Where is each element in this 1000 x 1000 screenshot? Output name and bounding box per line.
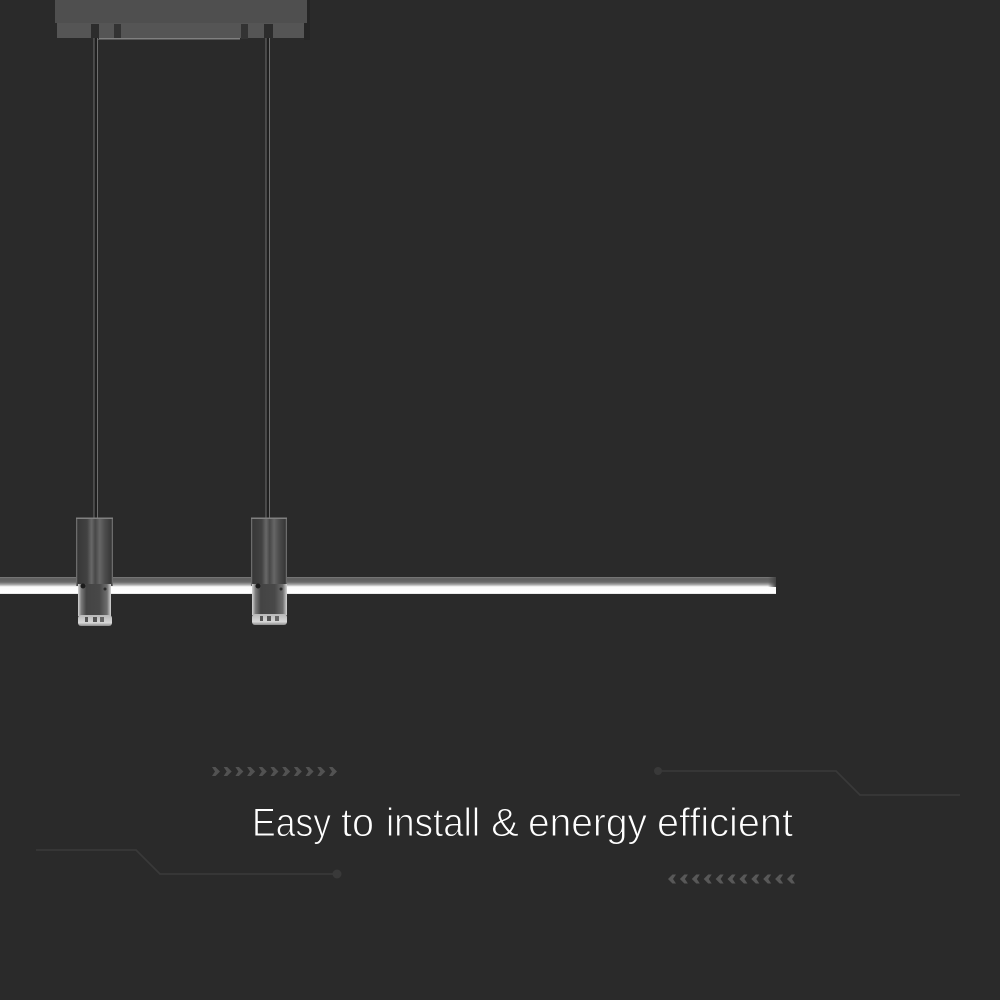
caption: & (491, 801, 519, 845)
caption: to (341, 801, 374, 845)
chevrons top (212, 767, 337, 776)
suspension cable right (266, 38, 270, 518)
caption: efficient (657, 801, 793, 845)
pendant cylinder left (76, 518, 113, 626)
caption: Easy (252, 801, 331, 845)
circuit line bottom left (36, 850, 342, 878)
chevrons bottom (668, 874, 795, 884)
suspension cable left (94, 38, 98, 518)
caption: install (386, 801, 480, 845)
caption (252, 801, 793, 845)
caption: energy (528, 801, 647, 845)
pendant cylinder right (251, 518, 287, 625)
ceiling canopy (55, 0, 310, 40)
circuit line top right (654, 767, 960, 795)
horizontal light bar (0, 577, 776, 594)
